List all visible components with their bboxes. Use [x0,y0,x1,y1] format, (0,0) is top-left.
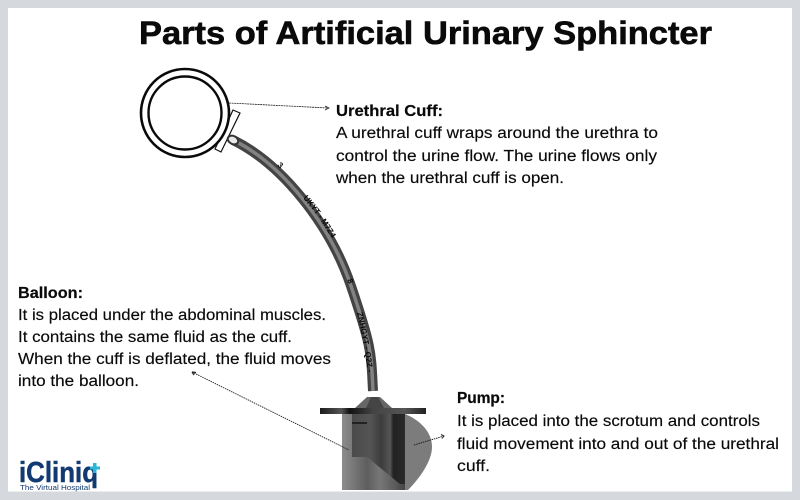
text block: pump: Pump: [457,390,505,407]
text block: pump: cuff. [457,458,490,475]
logo: iCliniq The Virtual Hospital: iCliniq [19,457,98,489]
text block: urethral cuff: A urethral cuff wraps around the urethra to [336,125,658,142]
illustration: balloon reservoir body with flange [320,397,426,490]
text block: balloon [18,285,331,390]
title: Parts of Artificial Urinary Sphincter [139,15,712,51]
text block: pump: It is placed into the scrotum and controls [457,413,760,430]
text block: pump [457,390,779,475]
logo: iCliniq The Virtual Hospital: The Virtual Hospital [20,483,90,492]
text block: balloon: It contains the same fluid as the cuff. [18,329,292,346]
illustration: connecting tube with printed markings: 8 [348,278,354,284]
text block: urethral cuff: control the urine flow. The urine flows only [336,148,657,165]
illustration: connecting tube with printed markings: 3 [278,162,283,168]
illustration: urethral cuff ring and tab [141,69,240,157]
illustration: connecting tube with printed markings: ZNHGYT - Q2Z - T1 [357,312,372,372]
text block: balloon: into the balloon. [18,373,139,390]
illustration: pump bulb [405,414,432,490]
text block: urethral cuff: Urethral Cuff: [336,103,443,120]
text block: urethral cuff: when the urethral cuff is open. [335,170,564,187]
callout arrow: urethral cuff [229,103,329,110]
callout arrow: pump [414,434,444,445]
callout arrow: balloon [192,372,349,450]
text block: urethral cuff [335,103,658,187]
text block: balloon: Balloon: [18,285,83,302]
text block: pump: fluid movement into and out of the urethral [457,436,779,453]
text block: balloon: When the cuff is deflated, the fluid moves [18,351,331,368]
illustration: connecting tube with printed markings [226,134,378,392]
text block: balloon: It is placed under the abdominal muscles. [18,307,326,324]
